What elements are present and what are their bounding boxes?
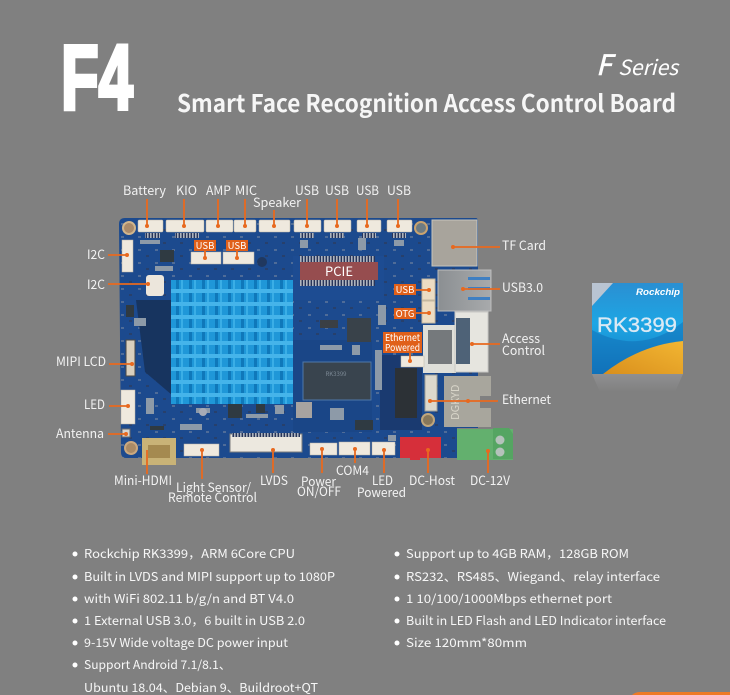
feature list: left column <box>72 545 335 695</box>
labels and leader lines: top row: AMP <box>206 180 231 199</box>
heatsink <box>171 280 293 404</box>
feature list: left column: Built in LVDS and MIPI support up to 1080P <box>84 568 335 585</box>
labels and leader lines: left side: Antenna <box>56 423 104 442</box>
labels and leader lines: bottom row: Remote Control <box>168 487 257 506</box>
feature list: left column: 1 External USB 3.0，6 built in USB 2.0 <box>84 612 305 629</box>
feature list: left column: Support Android 7.1/8.1、 <box>84 656 231 673</box>
TF card slot <box>432 220 477 266</box>
dark board areas <box>136 300 172 395</box>
LED connector <box>121 390 135 424</box>
labels and leader lines: right side: Access <box>502 328 540 347</box>
labels and leader lines: top row: MIC <box>235 180 257 199</box>
inner USB connectors <box>191 252 221 264</box>
feature list: right column: Size 120mm*80mm <box>406 634 527 651</box>
orange USB, OTG and Ethernet Powered tags: Ethernet <box>385 330 420 344</box>
heading: Smart Face Recognition Access Control Board <box>177 84 676 119</box>
series label <box>596 44 680 84</box>
labels and leader lines: left side: MIPI LCD <box>56 351 106 370</box>
labels and leader lines: top row: USB <box>387 180 411 199</box>
access control connector <box>455 312 488 372</box>
ethernet powered connector <box>401 356 424 367</box>
labels and leader lines: top row <box>123 180 411 228</box>
RK3399 chip badge: Rockchip <box>636 287 681 297</box>
labels and leader lines: right side: USB3.0 <box>502 277 543 296</box>
secondary chips <box>347 318 371 342</box>
circuit board: RK3399 <box>325 369 347 378</box>
mounting holes <box>123 222 135 234</box>
orange USB, OTG and Ethernet Powered tags: Powered <box>385 340 420 354</box>
labels and leader lines: bottom row: Light Sensor/ <box>176 477 251 496</box>
labels and leader lines: bottom row: Powered <box>357 482 406 501</box>
feature list: left column: Rockchip RK3399，ARM 6Core CPU <box>84 545 295 562</box>
RK3399 chip badge: RK3399 <box>597 314 677 337</box>
orange USB tags: USB <box>228 238 246 252</box>
series label: Series <box>618 52 680 82</box>
labels and leader lines: right side <box>428 235 551 408</box>
small components <box>126 238 404 441</box>
feature list: left column: 9-15V Wide voltage DC power input <box>84 634 288 651</box>
feature list: left column: with WiFi 802.11 b/g/n and BT V4.0 <box>84 590 294 607</box>
labels and leader lines: right side: Ethernet <box>502 389 551 408</box>
labels and leader lines: top row: KIO <box>176 180 197 199</box>
MIPI connector <box>126 340 135 376</box>
labels and leader lines: right side: Control <box>502 340 545 359</box>
labels and leader lines: top row: Battery <box>123 180 166 199</box>
labels and leader lines: top row: USB <box>356 180 379 199</box>
labels and leader lines: right side: TF Card <box>502 235 546 254</box>
antenna socket <box>122 429 130 437</box>
orange USB tags: USB <box>196 238 214 252</box>
label sticker <box>423 325 456 373</box>
PCIE slot: PCIE <box>325 261 353 280</box>
left I2C connectors <box>122 240 133 272</box>
labels and leader lines: bottom row: DC-Host <box>409 470 455 489</box>
feature list: right column <box>394 545 666 651</box>
orange USB, OTG and Ethernet Powered tags: USB <box>396 282 414 296</box>
labels and leader lines: bottom row <box>114 447 511 506</box>
title: F4: F4 <box>61 27 133 129</box>
ethernet jack <box>444 376 491 427</box>
labels and leader lines: bottom row: Power <box>301 471 336 490</box>
orange USB tags <box>194 238 248 260</box>
labels and leader lines: top row: USB <box>295 180 319 199</box>
SoC chip <box>303 362 371 400</box>
feature list: right column: Built in LED Flash and LED Indicator interface <box>406 612 666 629</box>
labels and leader lines: bottom row: LED <box>372 470 393 489</box>
orange USB, OTG and Ethernet Powered tags: OTG <box>396 306 414 320</box>
labels and leader lines: top row: Speaker <box>253 192 301 211</box>
labels and leader lines: bottom row: COM4 <box>336 460 369 479</box>
labels and leader lines: left side: LED <box>84 394 105 413</box>
ethernet jack: DGKYD <box>447 385 463 420</box>
board base <box>119 218 488 458</box>
labels and leader lines: left side: I2C <box>87 274 105 293</box>
labels and leader lines: bottom row: LVDS <box>260 470 288 489</box>
circuit board <box>119 218 513 465</box>
RK3399 chip badge <box>592 283 683 392</box>
orange strip at bottom edge <box>632 692 730 695</box>
labels and leader lines: left side <box>56 244 150 442</box>
feature list: right column: Support up to 4GB RAM，128GB ROM <box>406 545 629 562</box>
labels and leader lines: bottom row: Mini-HDMI <box>114 470 172 489</box>
bottom connectors <box>184 444 219 456</box>
orange USB, OTG and Ethernet Powered tags <box>383 282 431 363</box>
labels and leader lines: top row: USB <box>325 180 349 199</box>
feature list: right column: RS232、RS485、Wiegand、relay interface <box>406 568 660 585</box>
ethernet header <box>425 375 437 411</box>
labels and leader lines: bottom row: DC-12V <box>470 470 511 489</box>
labels and leader lines: left side: I2C <box>87 244 105 263</box>
USB 3.0 port <box>438 270 491 311</box>
side USB and OTG connectors <box>422 279 435 300</box>
series label: F <box>596 44 616 84</box>
connectors top row <box>138 220 163 232</box>
Mini-HDMI socket <box>142 438 176 465</box>
labels and leader lines: bottom row: ON/OFF <box>297 481 341 500</box>
feature list: right column: 1 10/100/1000Mbps ethernet port <box>406 590 613 607</box>
DC host connector <box>400 437 441 460</box>
PCIE slot <box>300 256 378 286</box>
DC 12V terminal <box>457 428 513 460</box>
